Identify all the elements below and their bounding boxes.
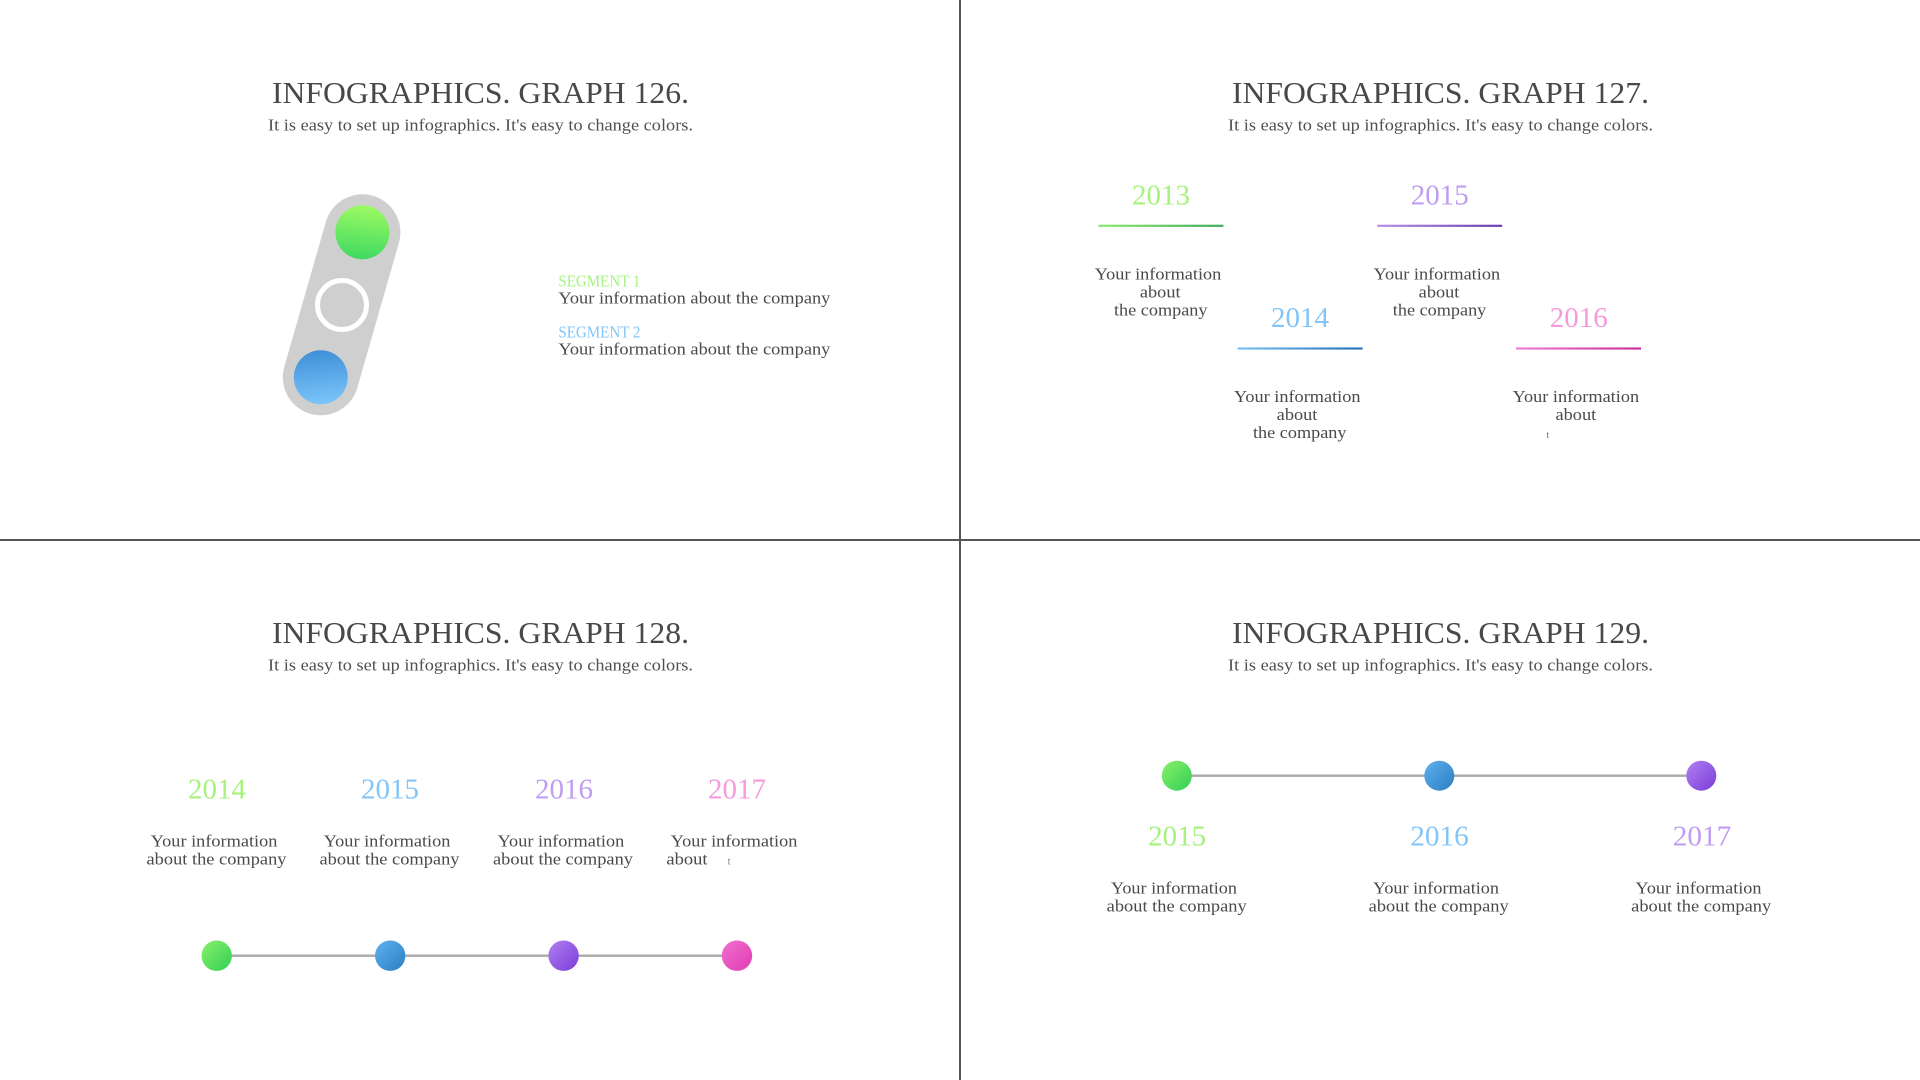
timeline: four dots — [202, 940, 752, 971]
milestone: 2015: Your information — [1374, 264, 1501, 283]
title: graph 127: INFOGRAPHICS. GRAPH 127. — [1232, 75, 1649, 110]
subtitle: graph 128: It is easy to set up infographics. It's easy to change colors. — [268, 656, 693, 675]
year column: 2015: about the company — [1107, 897, 1247, 916]
legend: segment 1 — [558, 272, 831, 307]
year column: 2017: t — [728, 857, 731, 868]
year column: 2016 — [1369, 821, 1509, 916]
year column: 2017: 2017 — [708, 774, 766, 805]
milestone: 2013: the company — [1114, 300, 1208, 319]
year column: 2017: Your information — [671, 832, 798, 851]
title: graph 126: INFOGRAPHICS. GRAPH 126. — [272, 75, 689, 110]
milestone: 2016 — [1513, 303, 1641, 441]
slanted pill chart — [294, 205, 389, 404]
timeline: three dots — [1162, 761, 1716, 791]
year column: 2016: about the company — [493, 850, 634, 869]
milestone: 2013 — [1095, 180, 1223, 319]
year column: 2014: about the company — [146, 850, 287, 869]
milestone: 2015: about — [1419, 282, 1460, 301]
milestone: 2014 — [1234, 303, 1363, 442]
year column: 2015: Your information — [324, 832, 451, 851]
year column: 2017 — [1631, 821, 1772, 916]
milestone: 2015: 2015 — [1411, 180, 1469, 211]
legend: segment 2: Your information about the company — [558, 340, 831, 359]
subtitle: graph 129: It is easy to set up infographics. It's easy to change colors. — [1228, 656, 1653, 675]
legend: segment 2: SEGMENT 2 — [558, 323, 640, 342]
milestone: 2016: t — [1546, 430, 1550, 441]
year column: 2017 — [666, 774, 798, 869]
year column: 2016: about the company — [1369, 897, 1509, 916]
year column: 2015: about the company — [320, 850, 460, 869]
milestone: 2014: 2014 — [1271, 303, 1329, 334]
milestone: 2013: about — [1140, 282, 1181, 301]
panel: graph 128 — [146, 615, 798, 971]
milestone: 2014: about — [1277, 405, 1318, 424]
milestone: 2016: 2016 — [1550, 303, 1608, 334]
subtitle: graph 126: It is easy to set up infographics. It's easy to change colors. — [268, 116, 693, 135]
milestone: 2015: the company — [1393, 300, 1487, 319]
legend: segment 1: SEGMENT 1 — [558, 272, 640, 291]
year column: 2014: Your information — [151, 832, 278, 851]
year column: 2016: Your information — [1373, 878, 1500, 897]
icon: white ring — [318, 280, 366, 330]
year column: 2014 — [146, 774, 287, 869]
legend: segment 1: Your information about the company — [558, 288, 831, 307]
title: graph 128: INFOGRAPHICS. GRAPH 128. — [272, 615, 689, 650]
year column: 2017: 2017 — [1673, 821, 1731, 852]
year column: 2016: Your information — [498, 832, 625, 851]
legend: segment 2 — [558, 323, 831, 359]
year column: 2017: Your information — [1636, 878, 1762, 897]
panel: graph 129 — [1107, 615, 1772, 916]
year column: 2017: about — [666, 850, 708, 869]
milestone: 2015 — [1374, 180, 1502, 319]
panel: graph 126 — [268, 75, 831, 404]
panel: graph 127 — [1095, 75, 1653, 442]
milestone: 2013: 2013 — [1132, 180, 1190, 211]
year column: 2015: 2015 — [361, 774, 419, 805]
year column: 2015 — [320, 774, 460, 869]
year column: 2016 — [493, 774, 634, 869]
milestone: 2014: Your information — [1234, 387, 1361, 406]
milestone: 2014: the company — [1253, 423, 1347, 442]
milestone: 2016: Your information — [1513, 387, 1640, 406]
year column: 2014: 2014 — [188, 774, 246, 805]
year column: 2015 — [1107, 821, 1247, 916]
milestone: 2016: about — [1556, 405, 1596, 424]
icon: green dot — [335, 205, 389, 259]
year column: 2016: 2016 — [1410, 821, 1469, 852]
year column: 2015: 2015 — [1148, 821, 1206, 852]
year column: 2016: 2016 — [535, 774, 593, 805]
year column: 2017: about the company — [1631, 897, 1772, 916]
milestone: 2013: Your information — [1095, 264, 1222, 283]
title: graph 129: INFOGRAPHICS. GRAPH 129. — [1232, 615, 1649, 650]
subtitle: graph 127: It is easy to set up infographics. It's easy to change colors. — [1228, 116, 1653, 135]
icon: blue dot — [294, 350, 348, 404]
year column: 2015: Your information — [1111, 878, 1238, 897]
